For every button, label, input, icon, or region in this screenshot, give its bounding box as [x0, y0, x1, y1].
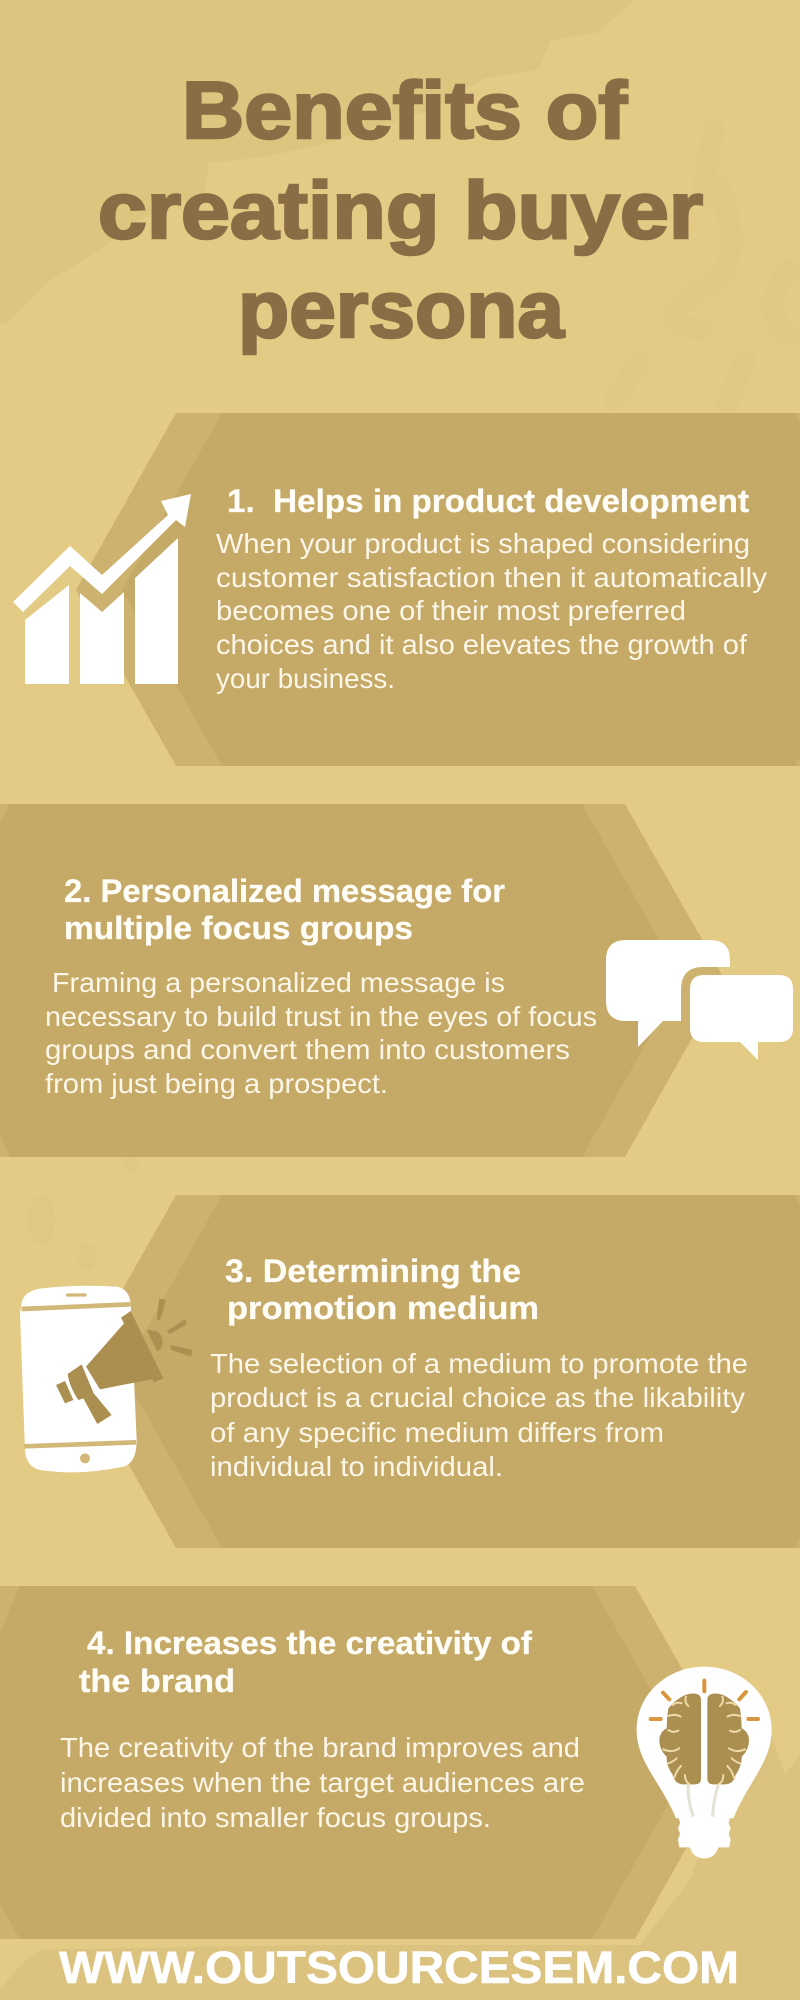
heading: 1: 1. Helps in product development — [227, 483, 749, 519]
icon: phone with megaphone — [20, 1286, 192, 1472]
panel: 1 product development — [13, 413, 800, 766]
text block: 1 — [216, 528, 767, 694]
heading: 2: multiple focus groups — [64, 910, 413, 946]
text block: 1: When your product is shaped considering — [216, 528, 750, 559]
heading: 3: 3. Determining the — [225, 1253, 521, 1289]
text block: 1: your business. — [216, 663, 395, 694]
title: creating buyer — [98, 166, 703, 256]
heading: 2: 2. Personalized message for — [64, 873, 505, 909]
text block: 4: The creativity of the brand improves and — [60, 1732, 580, 1763]
text block: 1: choices and it also elevates the growth of — [216, 629, 747, 660]
heading: 3: promotion medium — [227, 1290, 539, 1326]
text block: 2: Framing a personalized message is — [52, 967, 505, 998]
heading: 4 — [79, 1625, 532, 1699]
title — [98, 66, 703, 355]
text block: 2: from just being a prospect. — [45, 1068, 388, 1099]
heading: 4: 4. Increases the creativity of — [87, 1625, 532, 1661]
text block: 4: increases when the target audiences are — [60, 1767, 585, 1798]
text block: 1: customer satisfaction then it automatically — [216, 562, 767, 593]
footer website: WWW.OUTSOURCESEM.COM — [59, 1942, 739, 1993]
text block: 3: individual to individual. — [210, 1451, 503, 1482]
icon: brain light bulb — [637, 1667, 772, 1858]
text block: 2: necessary to build trust in the eyes of focus — [45, 1001, 597, 1032]
title: Benefits of — [182, 66, 628, 156]
heading: 2 — [64, 873, 505, 946]
heading: 3 — [225, 1253, 539, 1326]
text block: 3: product is a crucial choice as the likability — [210, 1382, 745, 1413]
panel: 3 promotion medium — [20, 1195, 800, 1548]
panel: 4 creativity — [0, 1586, 772, 1939]
panel: 2 personalized message — [0, 804, 793, 1157]
text block: 3: The selection of a medium to promote the — [210, 1348, 748, 1379]
text block: 3: of any specific medium differs from — [210, 1417, 664, 1448]
icon: growth bar chart with arrow — [13, 494, 191, 684]
title: persona — [238, 265, 565, 355]
text block: 2 — [45, 967, 597, 1099]
text block: 3 — [210, 1348, 748, 1482]
icon: chat bubbles — [606, 940, 793, 1060]
text block: 4: divided into smaller focus groups. — [60, 1802, 491, 1833]
text block: 4 — [60, 1732, 585, 1833]
text block: 2: groups and convert them into customers — [45, 1034, 570, 1065]
text block: 1: becomes one of their most preferred — [216, 595, 686, 626]
heading: 4: the brand — [79, 1663, 235, 1699]
